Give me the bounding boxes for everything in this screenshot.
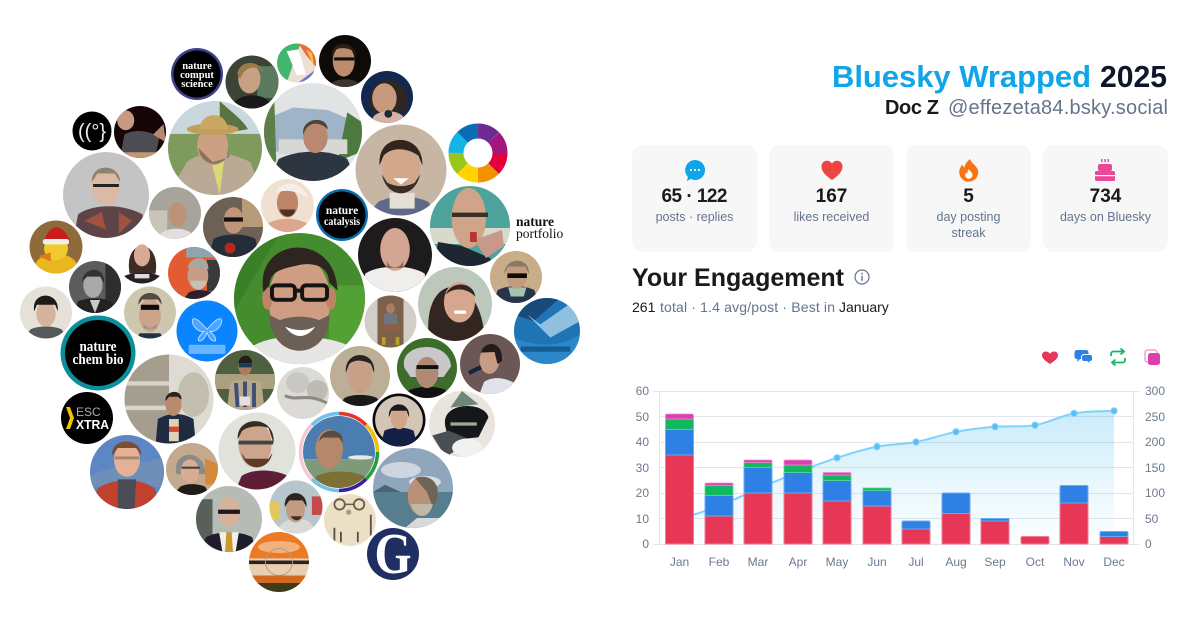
avatar: nature comput science logo: comput (180, 70, 214, 81)
avatar: mirror selfie on stairs (364, 296, 416, 348)
chart grid (653, 391, 1139, 544)
avatar: man with glasses sipping (430, 186, 510, 266)
stat card: day posting streak: day posting (937, 210, 1001, 224)
logo text: nature portfolio (516, 214, 563, 241)
icon: reposts legend arrows (1111, 348, 1125, 366)
profile name and handle: Doc Z (885, 97, 939, 119)
stat card: posts and replies: posts · replies (656, 210, 733, 224)
month labels: Nov (1063, 555, 1085, 569)
avatar: vintage sketch with glasses (324, 494, 376, 546)
avatar: shirtless man with santa hat (261, 179, 314, 232)
left axis labels: 0 (642, 537, 649, 551)
avatar: man with glasses on black (319, 35, 371, 87)
stacked bars: reposts (666, 419, 891, 496)
avatar: man in front of neon sign (168, 247, 220, 299)
avatar: man with dark sunglasses (490, 251, 542, 303)
avatar: nature chem bio logo (60, 316, 136, 390)
avatar: man by marble statue (124, 354, 214, 444)
month labels: Aug (945, 555, 967, 569)
avatar: speaker with microphone (114, 106, 166, 158)
right axis labels: 300 (1145, 384, 1165, 398)
avatar: man in a laboratory (270, 480, 322, 534)
month labels (670, 555, 1125, 569)
icon: info (855, 270, 869, 284)
engagement summary (632, 299, 889, 315)
stacked bars: replies (666, 430, 1128, 536)
avatar: man in floral shirt (63, 152, 149, 238)
title: Bluesky Wrapped (832, 59, 1091, 94)
avatar: man in black tee stone wall (330, 346, 390, 406)
avatar: sunset lake (249, 532, 309, 592)
avatar: grey sketch sculpture (277, 367, 329, 419)
stat card: day posting streak (906, 145, 1031, 252)
icon: replies legend bubbles (1074, 350, 1092, 364)
avatar: man with black ring border (372, 394, 426, 446)
avatar: woman with glasses and scarf (124, 244, 160, 284)
cumulative line (680, 411, 1114, 518)
month labels: Dec (1103, 555, 1125, 569)
avatar: man with tie (196, 486, 262, 552)
icon: chat bubble (685, 160, 705, 181)
cumulative points (676, 408, 1117, 521)
avatar: bald man in white t-shirt (358, 218, 432, 292)
avatar: speaker in profile at a microphone (460, 334, 520, 394)
left axis labels: 30 (636, 461, 649, 475)
profile name and handle: @effezeta84.bsky.social (948, 97, 1168, 119)
right axis labels: 150 (1145, 461, 1165, 475)
avatar: man with sunglasses in black jacket (203, 197, 263, 257)
month labels: Apr (789, 555, 807, 569)
avatar: young man in dark shirt (226, 56, 278, 108)
avatar: blue butterfly logo (176, 300, 238, 362)
stat card: days on Bluesky: days on Bluesky (1060, 210, 1152, 224)
avatar: man with rainbow ring (300, 414, 378, 490)
avatar: man with straw hat (168, 101, 262, 195)
avatar: man with red jacket (90, 435, 164, 509)
avatar: man with grey curly hair (397, 338, 457, 398)
avatar: man in striped shirt (215, 350, 275, 410)
right axis labels: 50 (1145, 512, 1159, 526)
avatar: long-haired man with microphone (361, 71, 413, 127)
engagement summary: January (839, 299, 889, 315)
avatar: woman with long dark hair (418, 267, 492, 341)
stat card: likes received: 167 (816, 186, 847, 207)
combined engagement chart (636, 384, 1165, 569)
avatar: The Guardian logo: G (374, 521, 412, 586)
month labels: Jan (670, 555, 689, 569)
logo text: nature portfolio: nature (516, 214, 554, 229)
icon: birthday cake (1095, 159, 1115, 181)
left axis labels: 40 (636, 435, 649, 449)
stat card: posts and replies (632, 145, 757, 252)
avatar: nature chem bio logo: chem bio (72, 352, 124, 368)
left axis labels: 60 (636, 384, 649, 398)
month labels: Feb (709, 555, 730, 569)
stat card: days on Bluesky: 734 (1090, 186, 1122, 207)
avatar: nature catalysis logo (316, 189, 368, 241)
avatar: bracket logo: ((°} (78, 121, 106, 143)
right axis labels: 200 (1145, 435, 1165, 449)
avatar: young man with glasses (20, 286, 72, 338)
left axis labels: 20 (636, 486, 649, 500)
month labels: Jun (867, 555, 887, 569)
avatar: nature comput science logo (171, 48, 223, 100)
avatar: nature comput science logo: science (181, 79, 213, 90)
month labels: May (826, 555, 848, 569)
month labels: Oct (1026, 555, 1045, 569)
avatar: blue abstract painting (514, 298, 580, 364)
right axis labels: 250 (1145, 410, 1165, 424)
icon: likes legend heart (1042, 352, 1058, 364)
chart legend (1042, 348, 1160, 366)
avatar: nature chem bio logo: nature (80, 339, 117, 355)
avatar: woman with grey hair (166, 443, 218, 495)
avatar bubble cluster (20, 35, 580, 592)
icon: flame (959, 159, 978, 182)
title: 2025 (1100, 59, 1167, 94)
avatar: bracket logo (72, 112, 112, 150)
avatar: man with sunglasses looking up (124, 286, 176, 338)
avatar: nature comput science logo: nature (182, 61, 212, 72)
cumulative area (680, 411, 1114, 544)
icon: heart (822, 161, 842, 180)
left axis labels (636, 384, 649, 551)
month labels: Mar (748, 555, 768, 569)
stacked bars: quotes (666, 414, 851, 486)
stat card: days on Bluesky (1043, 145, 1168, 252)
stat card: day posting streak: streak (951, 226, 986, 240)
avatar: man looking at the sea (373, 448, 453, 528)
avatar: ninja cat (429, 391, 495, 457)
avatar: nature catalysis logo: nature (326, 205, 358, 217)
avatar: altmetric donut logo (456, 131, 500, 175)
stat card: day posting streak: 5 (963, 186, 974, 207)
avatar: man with glasses and maroon shirt (218, 412, 296, 490)
avatar: ESC XTRA logo: ESC (76, 405, 101, 419)
avatar: nature catalysis logo: catalysis (324, 216, 360, 228)
avatar: rubber duck with santa hat (30, 220, 82, 274)
stacked bars: likes (666, 455, 1128, 544)
left axis labels: 10 (636, 512, 649, 526)
right axis labels: 100 (1145, 486, 1165, 500)
avatar: smiling man beige wall (356, 124, 446, 216)
stat card: posts and replies: 65 · 122 (662, 186, 728, 207)
month labels: Jul (908, 555, 924, 569)
avatar: man in grey room (149, 187, 201, 239)
avatar: black and white portrait (69, 261, 121, 313)
left axis labels: 50 (636, 410, 649, 424)
stat card: likes received: likes received (794, 210, 869, 224)
stat card: likes received (769, 145, 894, 252)
right axis labels: 0 (1145, 537, 1152, 551)
heading: Your Engagement: Your Engagement (632, 264, 845, 292)
month labels: Sep (984, 555, 1006, 569)
avatar: ESC XTRA logo (61, 392, 113, 444)
engagement summary: total · 1.4 avg/post · Best in (660, 299, 835, 315)
icon: quotes legend squares (1145, 350, 1160, 365)
avatar: main profile, bearded man with glasses (234, 233, 365, 364)
avatar: ESC XTRA logo: XTRA (76, 417, 110, 432)
engagement summary: 261 (632, 299, 656, 315)
right axis labels (1145, 384, 1165, 551)
avatar: man in polo by the lake (264, 83, 362, 181)
logo text: nature portfolio: portfolio (516, 226, 563, 241)
avatar: colourful geometric logo (277, 44, 316, 82)
